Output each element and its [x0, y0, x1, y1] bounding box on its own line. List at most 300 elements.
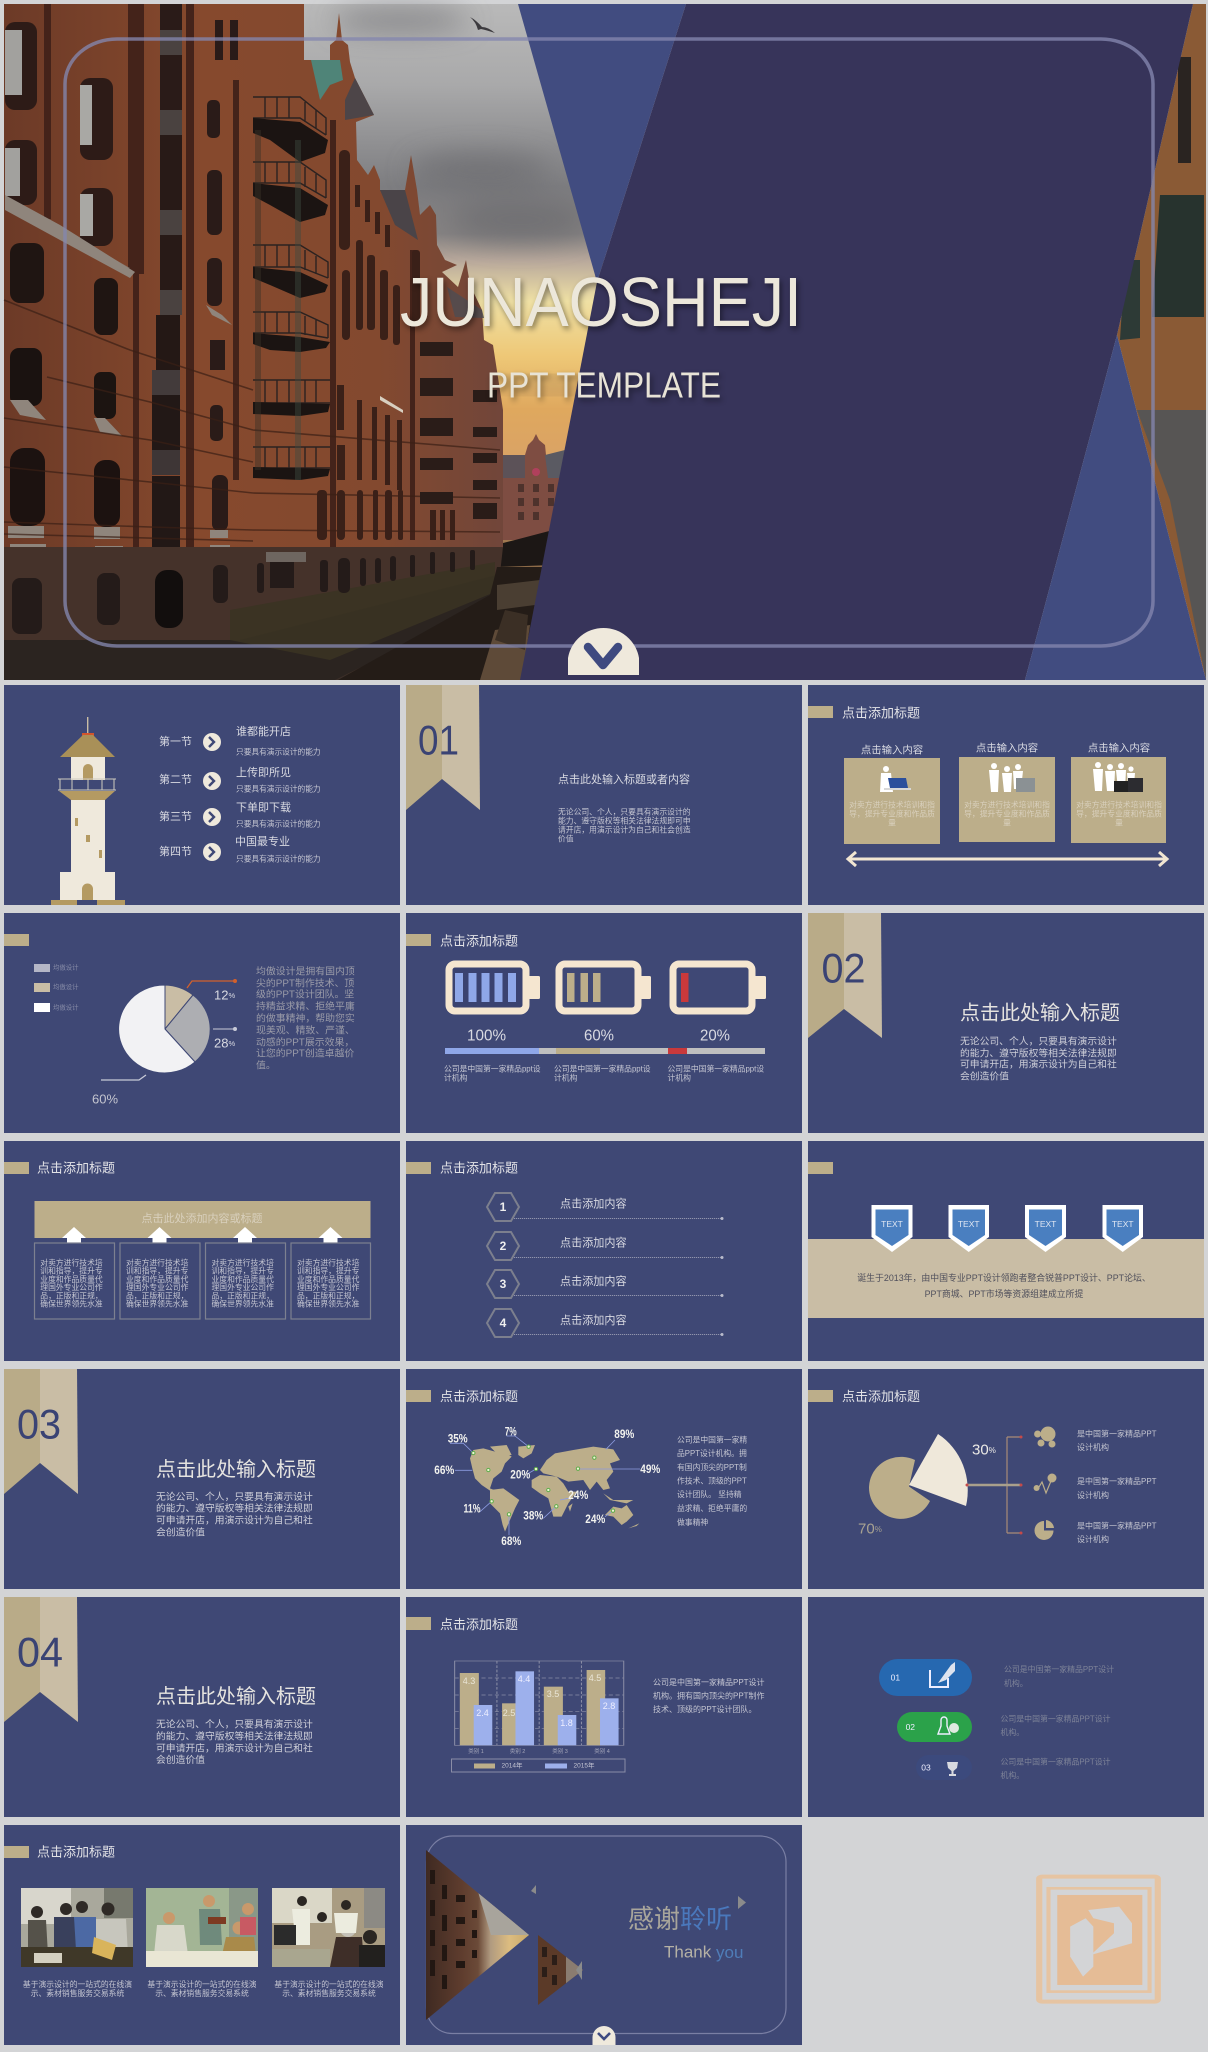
- box 1: 理国外专业公司作: [40, 1282, 103, 1292]
- facade: [4, 4, 503, 548]
- legend: 2014年: [502, 1760, 523, 1770]
- panel: world map: [406, 1369, 802, 1589]
- card 3: 对卖方进行技术培训和指: [1076, 800, 1162, 810]
- map labels: 66%: [434, 1463, 455, 1477]
- category labels: 类别 4: [594, 1747, 610, 1755]
- map labels: 24%: [568, 1488, 589, 1502]
- captions: 基于演示设计的一站式的在线演: [274, 1979, 384, 1989]
- box 2: 确保世界领先水准: [126, 1298, 189, 1308]
- subtitle: PPT TEMPLATE: [487, 364, 721, 406]
- card 2: [959, 742, 1055, 842]
- panel: section 03: [4, 1369, 400, 1589]
- legend: 均傲设计: [53, 1002, 79, 1012]
- icon: line dots: [1034, 1474, 1056, 1493]
- list item 2: 只要具有演示设计的能力: [236, 784, 321, 794]
- callout 12%: [187, 979, 237, 1002]
- connector lines: [450, 1436, 640, 1535]
- dark vertical strips: [44, 4, 415, 680]
- section body text: 会创造价值: [960, 1070, 1009, 1082]
- paragraph: 均傲设计是拥有国内顶: [256, 964, 355, 978]
- tan band: [808, 1239, 1204, 1318]
- category labels: [468, 1747, 610, 1755]
- pill 02: 02: [906, 1722, 915, 1732]
- pill 02: [897, 1712, 972, 1742]
- box 4: 训和指导，提升专: [297, 1266, 360, 1276]
- captions: 计机构: [554, 1072, 578, 1082]
- text item 1: [1004, 1664, 1114, 1688]
- box 3: 对卖方进行技术培: [212, 1258, 274, 1268]
- captions: 示、素材销售服务交易系统: [282, 1988, 376, 1998]
- panel: pie chart slide: [4, 913, 400, 1133]
- paragraph: 现美观、精致、严谨、: [256, 1024, 355, 1036]
- ribbon with number 03: [4, 1369, 78, 1494]
- map labels: 38%: [523, 1509, 544, 1523]
- box 4: 业度和作品质量代: [297, 1274, 360, 1284]
- panel: photo row slide: [4, 1825, 400, 2045]
- item 3: 3: [500, 1277, 507, 1291]
- ribbon with number 02: 02: [822, 944, 866, 992]
- list item 4: 只要具有演示设计的能力: [236, 854, 321, 864]
- captions: 公司是中国第一家精品ppt设: [554, 1064, 651, 1074]
- text item 3: [1077, 1520, 1157, 1544]
- captions: [23, 1979, 384, 1998]
- section body text: 无论公司、个人，只要具有演示设计: [156, 1490, 313, 1503]
- text item 3: 设计机构: [1077, 1534, 1109, 1544]
- heading: 点击添加标题: [440, 1160, 518, 1176]
- item 2: 2: [500, 1239, 507, 1253]
- heading: 点击添加标题: [37, 1160, 115, 1176]
- badge 1: TEXT: [881, 1219, 903, 1229]
- badge 4: [1102, 1205, 1143, 1252]
- box 3: 理国外专业公司作: [212, 1282, 274, 1292]
- rounded outline frame: [65, 39, 1153, 646]
- card 3: 量: [1115, 818, 1123, 828]
- bar values: 2.4: [476, 1708, 489, 1718]
- paragraph: 作技术、顶级的PPT: [677, 1476, 747, 1486]
- paragraph: 设计团队。 坚持精: [677, 1489, 742, 1499]
- thank you subtitle: Thank you: [664, 1942, 743, 1962]
- legend: [452, 1759, 625, 1772]
- list item 1: 只要具有演示设计的能力: [236, 746, 321, 756]
- bar values: 3.5: [547, 1689, 559, 1699]
- item 1: [487, 1193, 724, 1221]
- list item 1: 第一节: [159, 734, 192, 748]
- heading: [406, 934, 518, 948]
- box 3: 确保世界领先水准: [212, 1298, 274, 1308]
- icon: dots: [1034, 1426, 1056, 1448]
- balconies: [253, 97, 330, 480]
- list item 1: [159, 724, 321, 756]
- badge 4: TEXT: [1112, 1219, 1134, 1229]
- paragraph: 公司是中国第一家精: [677, 1434, 747, 1444]
- badge 3: TEXT: [1035, 1219, 1056, 1229]
- ribbon with number 03: 03: [17, 1400, 61, 1448]
- pill 03: [916, 1755, 972, 1780]
- map labels: 20%: [510, 1468, 531, 1482]
- map labels: 49%: [640, 1462, 661, 1476]
- callout 60%: 60%: [92, 1092, 118, 1106]
- box 2: 训和指导，提升专: [126, 1266, 189, 1276]
- item 1: 点击添加内容: [560, 1196, 627, 1210]
- section body text: 无论公司、个人，只要具有演示设计的: [558, 806, 691, 816]
- percent labels: [467, 1028, 730, 1044]
- water: [338, 567, 553, 680]
- text item 2: 机构。: [1000, 1727, 1024, 1737]
- card 1: 导，提升专业度和作品质: [849, 808, 935, 818]
- bar values: [463, 1673, 615, 1728]
- section body text: 请开店，用演示设计为自己和社会创造: [558, 824, 691, 834]
- photo 1: team meeting: [21, 1888, 133, 1967]
- heading: 点击添加标题: [440, 1389, 518, 1404]
- pill 01: 01: [891, 1673, 900, 1683]
- paragraph: 技术、顶级的PPT设计团队。: [653, 1704, 757, 1714]
- captions: 基于演示设计的一站式的在线演: [147, 1979, 257, 1989]
- percent labels: 60%: [584, 1028, 614, 1044]
- panel: three cards: [808, 685, 1204, 905]
- badge 1: [872, 1205, 912, 1252]
- pie 70 percent: [869, 1457, 930, 1519]
- shape: blue triangle top: [518, 4, 686, 282]
- icon: lighthouse: [51, 717, 125, 905]
- card 2: 点击输入内容: [976, 742, 1038, 754]
- small arched windows: [317, 150, 455, 540]
- paragraph: [256, 964, 355, 1072]
- list item 3: 只要具有演示设计的能力: [236, 818, 321, 828]
- panel: section 01: [406, 685, 802, 905]
- paragraph: 做事精神: [677, 1517, 708, 1527]
- card 3: 点击输入内容: [1088, 742, 1150, 754]
- list item 2: 上传即所见: [236, 766, 291, 779]
- card 3: 导，提升专业度和作品质: [1076, 808, 1162, 818]
- callout 60%: [92, 1075, 146, 1106]
- ribbon with number 04: 04: [17, 1628, 63, 1676]
- small triangle decorations: [531, 1885, 746, 1980]
- box 3: 训和指导，提升专: [212, 1266, 274, 1276]
- box 1: 对卖方进行技术培: [40, 1258, 103, 1268]
- panel: contents slide with lighthouse: [4, 685, 400, 905]
- heading: [808, 706, 920, 720]
- legend: [34, 962, 79, 1012]
- item 3: 点击添加内容: [560, 1274, 627, 1288]
- text item 1: 机构。: [1004, 1678, 1028, 1688]
- banner: 点击此处添加内容或标题: [142, 1211, 262, 1225]
- map labels: 11%: [464, 1501, 481, 1515]
- card 2: 量: [1003, 818, 1011, 828]
- list item 4: 第四节: [159, 844, 192, 858]
- text item 2: [1077, 1476, 1157, 1500]
- ribbon with number 02: [808, 913, 882, 1038]
- box 1: 业度和作品质量代: [40, 1274, 103, 1284]
- section body text: 的能力、遵守版权等相关法律法规即: [156, 1502, 313, 1514]
- category labels: 类别 1: [468, 1747, 484, 1755]
- band text: PPT商城、PPT市场等资源组建成立所提: [925, 1288, 1084, 1299]
- location dots: [472, 1445, 615, 1516]
- text item 3: 机构。: [1000, 1770, 1024, 1780]
- box 4: 对卖方进行技术培: [297, 1258, 360, 1268]
- text item 3: [1000, 1756, 1111, 1780]
- captions: 公司是中国第一家精品ppt设: [668, 1064, 764, 1074]
- callout 28%: 28%: [214, 1036, 235, 1050]
- horizontal brick courses: [4, 300, 500, 541]
- list item 4: 中国最专业: [235, 834, 290, 848]
- paragraph: 公司是中国第一家精品PPT设计: [653, 1677, 765, 1687]
- heading marker: [808, 1162, 833, 1174]
- box 4: [291, 1243, 370, 1319]
- panel: section 02: [808, 913, 1204, 1133]
- box 4: 理国外专业公司作: [297, 1282, 360, 1292]
- item 2: 点击添加内容: [560, 1236, 627, 1250]
- badge 2: TEXT: [958, 1219, 980, 1229]
- item 2: [487, 1232, 724, 1260]
- paragraph: [677, 1434, 747, 1527]
- shape: blue triangle bottom right: [1025, 335, 1206, 680]
- category labels: 类别 3: [552, 1747, 568, 1755]
- bar values: 2.8: [603, 1701, 615, 1711]
- section body text: 可申请开店，用演示设计为自己和社: [156, 1514, 313, 1526]
- text item 2: 公司是中国第一家精品PPT设计: [1000, 1714, 1111, 1724]
- box 3: 业度和作品质量代: [212, 1274, 274, 1284]
- item 4: 点击添加内容: [560, 1313, 627, 1327]
- far balcony stacks: [420, 342, 497, 519]
- heading: 点击添加标题: [842, 706, 920, 720]
- captions: 公司是中国第一家精品ppt设: [444, 1064, 541, 1074]
- box 4: 品，正版和正规，: [297, 1290, 359, 1300]
- callout 28%: [213, 1027, 237, 1050]
- item 3: [487, 1270, 724, 1298]
- panel: section 04: [4, 1597, 400, 1817]
- bar values: 1.8: [560, 1718, 573, 1728]
- map labels: [434, 1425, 661, 1548]
- paragraph: 机构。拥有国内顶尖的PPT制作: [653, 1690, 765, 1700]
- captions: 示、素材销售服务交易系统: [155, 1988, 249, 1998]
- list item 1: 谁都能开店: [236, 724, 291, 738]
- panel: numbered list: [406, 1141, 802, 1361]
- section title: 点击此处输入标题或者内容: [558, 772, 690, 786]
- box 2: 品，正版和正规，: [126, 1290, 188, 1300]
- text item 3: 是中国第一家精品PPT: [1077, 1520, 1157, 1530]
- section title: 点击此处输入标题: [156, 1685, 316, 1708]
- label 70%: 70%: [858, 1520, 882, 1538]
- photo 2: students at table: [146, 1888, 258, 1967]
- map: [450, 1436, 640, 1535]
- rounded outline frame: [426, 1836, 786, 2034]
- item 4: [487, 1309, 724, 1337]
- text item 1: [1077, 1428, 1157, 1452]
- card 1: 点击输入内容: [861, 744, 923, 756]
- bar values: 4.5: [589, 1673, 601, 1683]
- banner: [34, 1201, 370, 1238]
- section title: 点击此处输入标题: [156, 1458, 316, 1481]
- paragraph: 有国内顶尖的PPT制: [677, 1462, 747, 1472]
- battery 100%: [449, 964, 540, 1011]
- legend: 均傲设计: [53, 962, 79, 972]
- pie slice 30 percent: [909, 1434, 968, 1506]
- panel: TEXT badges slide: [808, 1141, 1204, 1361]
- section body text: 会创造价值: [156, 1526, 205, 1538]
- ribbon with number 04: [4, 1597, 78, 1722]
- watermark stamp: [1039, 1877, 1158, 2002]
- heading: 点击添加标题: [440, 934, 518, 948]
- panel: 30/70 pie slide: [808, 1369, 1204, 1589]
- photo triangle small: [538, 1935, 584, 2005]
- pie chart: [119, 985, 210, 1073]
- bar values: 4.4: [518, 1674, 530, 1684]
- heading: [406, 1160, 518, 1176]
- box 1: 确保世界领先水准: [40, 1298, 103, 1308]
- pill 01: [879, 1659, 972, 1696]
- card 3: [1071, 742, 1166, 843]
- section body text: 会创造价值: [156, 1753, 205, 1766]
- section body text: [558, 806, 691, 844]
- box 1: [34, 1243, 114, 1319]
- text item 2: 是中国第一家精品PPT: [1077, 1476, 1157, 1486]
- bar values: 4.3: [463, 1676, 475, 1686]
- text item 1: 设计机构: [1077, 1442, 1109, 1452]
- bar values: 2.5: [503, 1708, 515, 1718]
- title: JUNAOSHEJI: [400, 263, 802, 341]
- band text: [857, 1272, 1151, 1299]
- paragraph: 动感的PPT展示效果，: [256, 1036, 354, 1048]
- arched windows: [5, 20, 238, 531]
- ribbon with number 01: 01: [418, 716, 459, 764]
- paragraph: 品PPT设计机构。拥: [677, 1448, 747, 1458]
- section body text: [156, 1718, 313, 1766]
- legend: 均傲设计: [53, 982, 79, 991]
- heading: [406, 1617, 518, 1632]
- thank you heading: 感谢聆听: [628, 1904, 732, 1934]
- box 2: 业度和作品质量代: [126, 1274, 189, 1284]
- heading marker: [4, 934, 29, 946]
- base wall: [4, 547, 503, 680]
- text item 2: 设计机构: [1077, 1490, 1109, 1500]
- bar chart: [455, 1661, 624, 1745]
- list item 3: 第三节: [159, 809, 192, 823]
- map labels: 89%: [614, 1427, 635, 1441]
- map labels: 24%: [585, 1512, 606, 1526]
- paragraph: 让您的PPT创造卓越价: [256, 1046, 354, 1060]
- paragraph: [653, 1677, 765, 1714]
- box 2: 理国外专业公司作: [126, 1282, 189, 1292]
- battery 20%: [673, 964, 766, 1011]
- arrow: double headed: [848, 852, 1167, 866]
- ribbon with number 01: [406, 685, 480, 810]
- section body text: 价值: [558, 834, 574, 844]
- heading: [808, 1389, 920, 1404]
- badge 3: [1025, 1205, 1066, 1252]
- icon: small pie: [1034, 1520, 1054, 1540]
- section body text: 无论公司、个人，只要具有演示设计: [960, 1034, 1117, 1048]
- captions: 基于演示设计的一站式的在线演: [23, 1979, 132, 1989]
- section body text: [960, 1034, 1117, 1082]
- panel: batteries slide: [406, 913, 802, 1133]
- card 2: 对卖方进行技术培训和指: [964, 800, 1050, 810]
- arrows up: [62, 1227, 342, 1243]
- box 4: 确保世界领先水准: [297, 1298, 360, 1308]
- map labels: 68%: [501, 1534, 522, 1548]
- photo triangle large: [426, 1850, 530, 2020]
- pill 03: 03: [921, 1763, 931, 1773]
- panel: four boxes with arrows: [4, 1141, 400, 1361]
- paragraph: 益求精、拒绝平庸的: [677, 1503, 747, 1513]
- percent labels: 100%: [467, 1028, 506, 1044]
- item 1: 1: [500, 1200, 507, 1214]
- paragraph: 值。: [256, 1058, 276, 1072]
- box 2: 对卖方进行技术培: [126, 1258, 189, 1268]
- heading: [406, 1389, 518, 1404]
- text item 1: 是中国第一家精品PPT: [1077, 1428, 1157, 1438]
- heading: 点击添加标题: [440, 1617, 518, 1632]
- text item 1: 公司是中国第一家精品PPT设计: [1004, 1664, 1114, 1674]
- card 1: 对卖方进行技术培训和指: [849, 800, 935, 810]
- heading: 点击添加标题: [37, 1844, 115, 1860]
- card 1: 量: [888, 818, 896, 828]
- box 1: 品，正版和正规，: [40, 1290, 103, 1300]
- paragraph: 持精益求精、拒绝平庸: [256, 1000, 355, 1012]
- callout 12%: 12%: [214, 988, 235, 1002]
- list item 3: 下单即下载: [236, 801, 291, 814]
- list item 4: [159, 834, 321, 864]
- box 3: 品，正版和正规，: [212, 1290, 274, 1300]
- category labels: 类别 2: [510, 1747, 525, 1755]
- shape: right photo edge: [1117, 4, 1206, 680]
- icon: chevron down button: [592, 2026, 616, 2045]
- photo 3: office group: [272, 1888, 385, 1967]
- paragraph: 级的PPT设计团队。坚: [256, 988, 354, 1000]
- stone sills and ledges: [5, 195, 232, 551]
- card 1: [844, 744, 940, 844]
- map labels: 7%: [505, 1425, 517, 1439]
- box 1: 训和指导，提升专: [40, 1266, 103, 1276]
- captions: [444, 1064, 764, 1082]
- bracket connector: [966, 1436, 1022, 1534]
- section title: 点击此处输入标题: [960, 1002, 1120, 1024]
- paragraph: 尖的PPT制作技术、顶: [256, 976, 354, 990]
- item 4: 4: [500, 1316, 507, 1330]
- panel: pills list: [808, 1597, 1204, 1817]
- list item 2: [159, 766, 321, 794]
- legend: 2015年: [574, 1760, 595, 1770]
- section body text: 的能力、遵守版权等相关法律法规即: [960, 1046, 1117, 1060]
- section body text: [156, 1490, 313, 1538]
- far building and bridge: [495, 434, 568, 567]
- icon: chevron down button: [568, 628, 639, 675]
- shape: dark central panel: [520, 4, 1193, 680]
- text item 3: 公司是中国第一家精品PPT设计: [1000, 1756, 1111, 1766]
- paragraph: 的做事精神，帮助您实: [256, 1012, 355, 1024]
- progress bar: [445, 1048, 765, 1054]
- map labels: 35%: [448, 1431, 468, 1445]
- list item 3: [159, 801, 321, 828]
- panel: cover slide: [4, 4, 1206, 680]
- panel: bar chart slide: [406, 1597, 802, 1817]
- text item 2: [1000, 1714, 1111, 1737]
- photo: canal warehouse at sunset: [4, 4, 620, 680]
- captions: 示、素材销售服务交易系统: [31, 1988, 124, 1998]
- section body text: 无论公司、个人，只要具有演示设计: [156, 1718, 313, 1730]
- section body text: 的能力、遵守版权等相关法律法规即: [156, 1730, 313, 1742]
- central window column: [152, 4, 182, 548]
- badge 2: [948, 1205, 989, 1252]
- label 30%: 30%: [972, 1442, 996, 1458]
- box 3: [206, 1243, 286, 1319]
- panel: thank you slide: [406, 1825, 802, 2045]
- box 2: [120, 1243, 200, 1319]
- section body text: 可申请开店，用演示设计为自己和社: [156, 1742, 313, 1754]
- heading: 点击添加标题: [842, 1389, 920, 1404]
- captions: 计机构: [444, 1072, 468, 1082]
- list item 2: 第二节: [159, 772, 192, 786]
- card 2: 导，提升专业度和作品质: [964, 808, 1050, 818]
